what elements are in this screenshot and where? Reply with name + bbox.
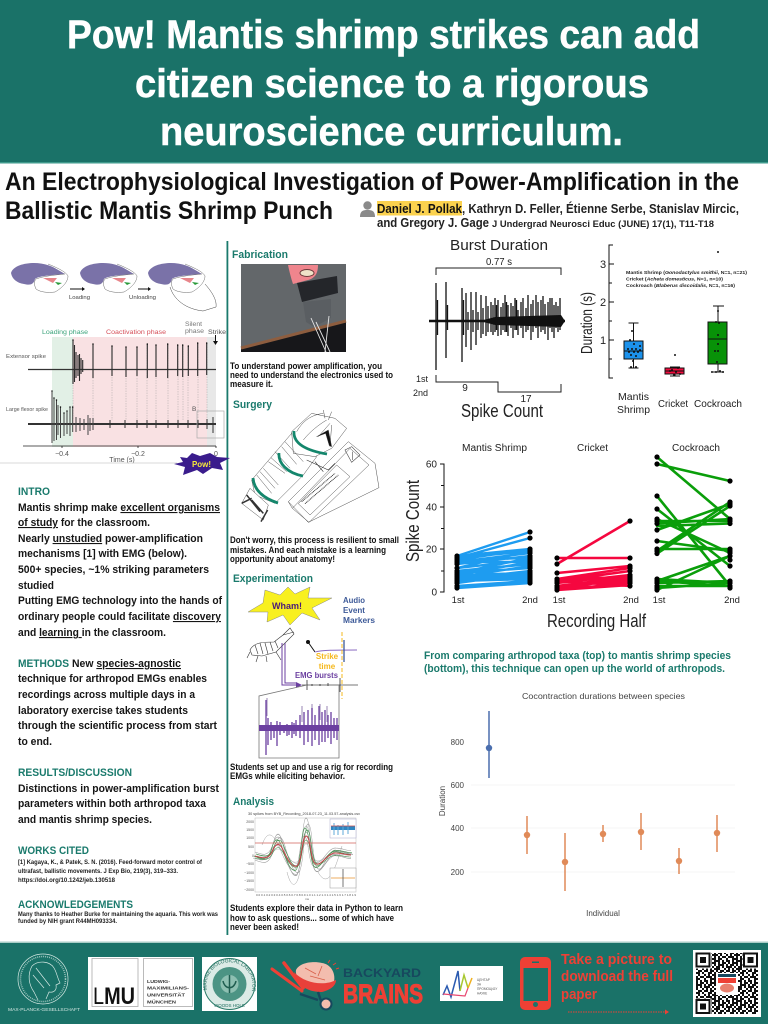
authors and citation: Daniel J. Pollak: [377, 202, 462, 216]
chart: duration box plot: Cricket: [658, 398, 688, 410]
text block: methods: through the scientific process from start: [18, 720, 217, 732]
label: audio event markers: Event: [343, 606, 365, 615]
logo: LMU: LUDWIG-: [147, 979, 170, 985]
panel: analysis: how to ask questions... some of which have: [230, 913, 394, 923]
text block: works cited: https://doi.org/10.1242/jeb.130518: [18, 878, 116, 884]
chart: spike waveforms: −2000: [244, 888, 254, 892]
time axis: −0.4: [55, 451, 69, 458]
logo: center for science promotion: ЦЕНТАР: [477, 978, 490, 982]
axis: Spike Count: [403, 480, 423, 562]
chart: duration box plot: Shrimp: [617, 404, 650, 416]
text block: works cited: [1] Kagaya, K., & Patek, S. N. (2016). Feed-forward motor control of: [18, 860, 203, 866]
axis: 60: [426, 460, 437, 470]
callout: Pow!: Pow!: [192, 459, 211, 469]
chart: burst duration trace: [413, 237, 565, 421]
authors and citation: , Kathryn D. Feller, Étienne Serbe, Stanislav Mircic,: [462, 201, 739, 216]
paper title: Ballistic Mantis Shrimp Punch: [5, 197, 333, 225]
chart: cocontraction durations: Duration: [438, 786, 447, 816]
chart: burst duration trace: 9: [462, 383, 468, 394]
axis: [403, 460, 740, 631]
call to action: [561, 951, 673, 1003]
logo: Max Planck: MAX-PLANCK-GESELLSCHAFT: [8, 1007, 81, 1012]
illustration: shrimp and rig: [247, 628, 358, 699]
text block: methods: METHODS: [18, 658, 69, 670]
chart: spike count by recording half: Mantis Shrimp: [462, 443, 527, 454]
chart: spike waveforms: 500: [248, 845, 254, 849]
logo: center for science promotion: ПРОМОЦИЈУ: [477, 987, 498, 991]
chart: zoomed EMG bursts: [259, 685, 339, 758]
axis: 40: [426, 502, 437, 514]
figure: EMG recording during strike: Large flexor spike: [6, 407, 48, 413]
chart: duration box plot: 3: [600, 259, 606, 271]
text block: intro: Nearly unstudied power-amplification: [18, 533, 203, 545]
axis: 1st: [653, 595, 666, 606]
text block: results: parameters within both arthropod taxa: [18, 798, 207, 810]
chart: cocontraction durations: [438, 691, 735, 918]
phase bands: Loading phase: [42, 329, 88, 336]
chart: cocontraction durations: 200: [451, 868, 465, 877]
chart: spike waveforms: 2000: [246, 820, 254, 824]
axis: 0: [431, 588, 437, 598]
text block: methods: recordings across multiple days in a: [18, 689, 196, 701]
series: cricket: [557, 521, 630, 590]
chart: cocontraction durations: 400: [451, 824, 465, 833]
panel: fabrication: To understand power amplification, you: [230, 361, 382, 371]
takeaway text: From comparing arthropod taxa (top) to mantis shrimp species: [424, 650, 731, 662]
panel: experimentation: EMG bursts: [295, 671, 339, 680]
authors and citation: and Gregory J. Gage: [377, 216, 489, 230]
logo: center for science promotion: НАУКЕ: [477, 992, 487, 996]
phase bands: Strike: [208, 329, 226, 336]
text block: acknowledgements: ACKNOWLEDGEMENTS: [18, 899, 133, 911]
label: audio event markers: [343, 596, 376, 625]
text block: results: and mantis shrimp species.: [18, 814, 152, 826]
panel: experimentation: Experimentation: [233, 573, 313, 585]
panel: surgery: Surgery: [233, 399, 273, 411]
panel: experimentation: Students set up and use a rig for recording: [230, 762, 393, 772]
label: audio event markers: Markers: [343, 616, 376, 625]
text block: intro: and learning in the classroom.: [18, 627, 166, 639]
chart: spike waveforms: 30 spikes from BYB_Recording_2018-07-23_11.03.57-analysis.csv: [248, 812, 360, 816]
icon: presenter: [360, 201, 375, 217]
logo: LMU: [88, 957, 194, 1010]
callout: Wham!: [248, 587, 332, 625]
brain diagrams: [11, 263, 216, 311]
panel: surgery: Don't worry, this process is resilient to small: [230, 535, 399, 545]
chart: burst duration trace: 17: [520, 394, 532, 405]
legend: Cricket ( Acheta domesticus , N=1, n=10): [626, 276, 723, 282]
chart: spike waveforms: 0: [252, 854, 254, 858]
header banner: neuroscience curriculum.: [160, 110, 623, 154]
logo: LMU: MÜNCHEN: [147, 998, 177, 1006]
axis: 20: [426, 544, 437, 556]
text block: intro: mechanisms [1] with EMG (below).: [18, 548, 187, 560]
chart: cocontraction durations: Individual: [586, 909, 620, 918]
chart: spike waveforms: −1500: [244, 879, 254, 883]
photo: electrode connector: [241, 264, 346, 352]
call to action: paper: [561, 986, 597, 1003]
panel: experimentation: [230, 573, 393, 781]
axis: 1st: [452, 595, 465, 606]
panel: analysis: never been asked!: [230, 922, 299, 932]
chart: spike waveforms: 1000: [246, 836, 254, 840]
text block: intro: of study for the classroom.: [18, 517, 150, 529]
blue species point: [486, 711, 492, 778]
logo: LMU: MAXIMILIANS-: [147, 986, 190, 992]
time axis: [0, 446, 218, 464]
column divider: [226, 241, 228, 935]
callout: Pow!: [174, 453, 230, 475]
text block: works cited: [18, 845, 203, 884]
chart: spike waveforms: −1000: [244, 871, 254, 875]
panel: fabrication: [230, 249, 393, 389]
logo: Backyard Brains: [272, 960, 423, 1010]
phase bands: phase: [185, 328, 204, 335]
callout: Wham!: Wham!: [272, 601, 302, 611]
text block: intro: 500+ species, ~1% striking parameters: [18, 564, 209, 576]
text block: acknowledgements: Many thanks to Heather Burke for maintaining the aquaria. This work was: [18, 912, 219, 918]
extensor and flexor traces: [28, 340, 216, 443]
text block: intro: Mantis shrimp make excellent organisms: [18, 502, 220, 514]
logo: Backyard Brains: BRAINS: [343, 979, 423, 1009]
header banner: Pow! Mantis shrimp strikes can add: [67, 13, 700, 57]
panel: experimentation: EMGs while eliciting behavior.: [230, 771, 345, 781]
logo: Backyard Brains: BACKYARD: [343, 966, 421, 980]
chart: spike waveforms: 0.0 0.1 0.2 0.3 0.4 0.5 0.6 0.7 0.8 0.9 1.0 1.1 1.2 1.3 1.4 1.5 1.6 1.7 1.8 1.9: [256, 893, 356, 897]
text block: methods: [18, 658, 217, 748]
logo: LMU: UNIVERSITÄT: [147, 992, 185, 998]
phase bands: Coactivation phase: [106, 329, 166, 336]
logo: LMU: LMU: [93, 983, 135, 1010]
panel: analysis: Students explore their data in Python to learn: [230, 903, 403, 913]
logo: center for science promotion: ЗА: [477, 982, 482, 986]
chart: duration box plot: Mantis: [618, 391, 649, 403]
boxes: [624, 306, 727, 376]
footer band: [0, 942, 768, 1024]
logo: Marine Biological Laboratory seal: WOODS HOLE: [214, 1003, 245, 1008]
panel: surgery: opportunity about anatomy!: [230, 554, 335, 564]
time axis: Time (s): [109, 457, 135, 464]
text block: methods: laboratory exercise takes students: [18, 705, 188, 717]
text block: works cited: WORKS CITED: [18, 845, 89, 857]
QR code: [693, 950, 761, 1017]
arrow: to QR code: [568, 1010, 669, 1014]
icon: phone: [520, 957, 551, 1010]
series: mantis shrimp: [457, 532, 530, 588]
text block: works cited: ultrafast, ballistic movements. J Exp Bio, 219(3), 319–333.: [18, 869, 178, 875]
panel: fabrication: need to understand the electronics used to: [230, 370, 393, 380]
panel: analysis: Analysis: [233, 796, 274, 808]
chart: spike waveforms: [244, 812, 360, 901]
series: cockroach: [657, 457, 730, 590]
text block: acknowledgements: funded by NIH grant R44MH093334.: [18, 919, 117, 925]
legend: Mantis Shrimp ( Gonodactylus smithii , N=1, n=21): [626, 270, 747, 276]
text block: results: [18, 767, 219, 826]
legend: [626, 270, 747, 289]
text block: methods: to end.: [18, 736, 52, 748]
chart: burst duration trace: Spike Count: [461, 401, 543, 421]
text block: intro: ordinary people could facilitate discovery: [18, 611, 222, 623]
legend: Cockroach ( Blaberus discoidalis , N=1, n=16): [626, 283, 735, 289]
text block: methods: technique for arthropod EMGs enables: [18, 673, 207, 685]
time axis: −0.2: [131, 451, 145, 458]
authors and citation: [377, 201, 739, 230]
authors and citation: J Undergrad Neurosci Educ (JUNE) 17(1), T11-T18: [492, 219, 714, 230]
header banner: [0, 0, 768, 164]
phase bands: Silent: [185, 321, 202, 328]
logo: center for science promotion: [440, 966, 503, 1001]
text block: results: RESULTS/DISCUSSION: [18, 767, 132, 779]
chart: cocontraction durations: 800: [451, 738, 465, 747]
panel: analysis: [230, 796, 403, 932]
chart: cocontraction durations: Cocontraction durations between species: [522, 691, 685, 701]
text block: methods: New species-agnostic: [72, 658, 181, 670]
text block: results: Distinctions in power-amplification burst: [18, 783, 219, 795]
panel: experimentation: time: [319, 662, 336, 671]
chart: duration box plot: 1: [600, 335, 606, 347]
chart: cocontraction durations: 600: [451, 781, 465, 790]
paper title: [5, 168, 739, 225]
chart: spike count by recording half: Cockroach: [672, 443, 720, 454]
figure: EMG recording during strike: Extensor spike: [6, 354, 46, 360]
panel: experimentation: Strike: [316, 652, 339, 661]
chart: spike waveforms: −500: [246, 862, 254, 866]
text block: intro: [18, 486, 222, 639]
axis: 1st: [553, 595, 566, 606]
call to action: download the full: [561, 968, 673, 985]
panel: surgery: mistakes. And each mistake is a learning: [230, 545, 386, 555]
chart: burst duration trace: 2nd: [413, 388, 428, 398]
takeaway text: (bottom), this technique can open up the world of arthropods.: [424, 663, 725, 675]
chart: burst duration trace: Burst Duration: [450, 237, 548, 254]
text block: intro: INTRO: [18, 486, 50, 498]
header banner: citizen science to a rigorous: [135, 62, 649, 106]
logo: Marine Biological Laboratory seal: MARINE BIOLOGICAL LABORATORY: [203, 959, 256, 992]
text block: intro: studied: [18, 580, 54, 592]
brain diagrams: Loading: [69, 295, 90, 301]
axis: Recording Half: [547, 611, 647, 631]
brain diagrams: Unloading: [129, 295, 156, 301]
logo: Marine Biological Laboratory seal: [202, 957, 257, 1011]
chart: spike waveforms: 1500: [246, 828, 254, 832]
chart: duration box plot: Cockroach: [694, 398, 742, 410]
panel: fabrication: measure it.: [230, 379, 273, 389]
chart: burst duration trace: 0.77 s: [486, 256, 512, 268]
illustration: shrimp in holder: [242, 410, 379, 522]
chart: spike waveforms: ms: [305, 897, 309, 901]
axis: 2nd: [724, 595, 740, 606]
axis: 2nd: [623, 595, 639, 606]
takeaway text: [424, 650, 731, 675]
chart: duration box plot: [579, 245, 747, 416]
text block: acknowledgements: [18, 899, 219, 925]
time axis: 0: [214, 451, 218, 458]
orange species points: [524, 813, 720, 891]
phase bands: [42, 321, 226, 447]
panel: surgery: [230, 399, 399, 564]
figure: EMG recording during strike: [0, 263, 226, 464]
call to action: Take a picture to: [561, 951, 672, 968]
logo: Max Planck: [8, 954, 81, 1012]
chart: spike count by recording half: Cricket: [577, 443, 608, 454]
chart: duration box plot: Duration (s): [579, 292, 596, 354]
label: audio event markers: Audio: [343, 596, 365, 605]
figure: EMG recording during strike: B: [192, 406, 196, 413]
panel: fabrication: Fabrication: [232, 249, 288, 261]
text block: intro: Putting EMG technology into the hands of: [18, 595, 222, 607]
chart: burst duration trace: 1st: [416, 374, 429, 384]
chart: spike count by recording half: [403, 443, 740, 631]
chart: duration box plot: 2: [600, 297, 606, 309]
axis: 2nd: [522, 595, 538, 606]
